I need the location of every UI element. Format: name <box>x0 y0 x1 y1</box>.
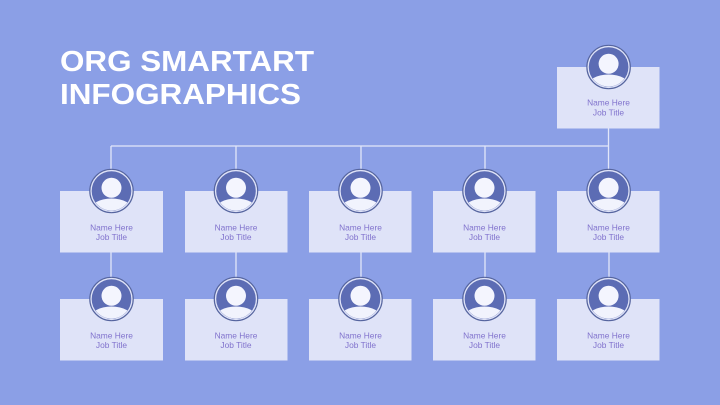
node: row 2 column 4: Job Title <box>469 232 500 242</box>
node: row 3 column 1: Job Title <box>96 340 127 350</box>
node: top manager <box>557 45 660 128</box>
node: row 3 column 3 <box>309 277 412 360</box>
node: row 3 column 2 <box>185 277 288 360</box>
node: row 3 column 2: Name Here <box>215 330 258 340</box>
node: row 2 column 4 <box>433 169 536 252</box>
node: row 2 column 3: Name Here <box>339 222 382 232</box>
node: row 3 column 1 <box>60 277 163 360</box>
node: row 2 column 5: Job Title <box>593 232 624 242</box>
node: row 2 column 3: Job Title <box>345 232 376 242</box>
title <box>60 46 314 111</box>
node: row 2 column 2: Job Title <box>220 232 252 242</box>
node: row 3 column 4: Name Here <box>463 330 506 340</box>
node: row 2 column 5: Name Here <box>587 222 630 232</box>
node: row 3 column 5: Name Here <box>587 330 630 340</box>
node: row 3 column 5: Job Title <box>593 340 624 350</box>
node: row 3 column 1: Name Here <box>90 330 133 340</box>
node: row 3 column 4: Job Title <box>469 340 500 350</box>
title: ORG SMARTART <box>60 46 314 78</box>
node: row 2 column 5 <box>557 169 660 252</box>
node: row 3 column 4 <box>433 277 536 360</box>
node: top manager: Job Title <box>593 108 624 118</box>
node: row 2 column 2: Name Here <box>215 222 258 232</box>
node: row 2 column 1: Job Title <box>96 232 127 242</box>
node: row 2 column 2 <box>185 169 288 252</box>
node: row 2 column 1 <box>60 169 163 252</box>
connector lines <box>111 128 609 278</box>
node: row 3 column 3: Job Title <box>345 340 376 350</box>
node: row 2 column 3 <box>309 169 412 252</box>
node: row 3 column 2: Job Title <box>220 340 252 350</box>
title: INFOGRAPHICS <box>60 79 301 111</box>
node: row 3 column 3: Name Here <box>339 330 382 340</box>
node: row 3 column 5 <box>557 277 660 360</box>
node: row 2 column 4: Name Here <box>463 222 506 232</box>
node: row 2 column 1: Name Here <box>90 222 133 232</box>
node: top manager: Name Here <box>587 98 630 108</box>
